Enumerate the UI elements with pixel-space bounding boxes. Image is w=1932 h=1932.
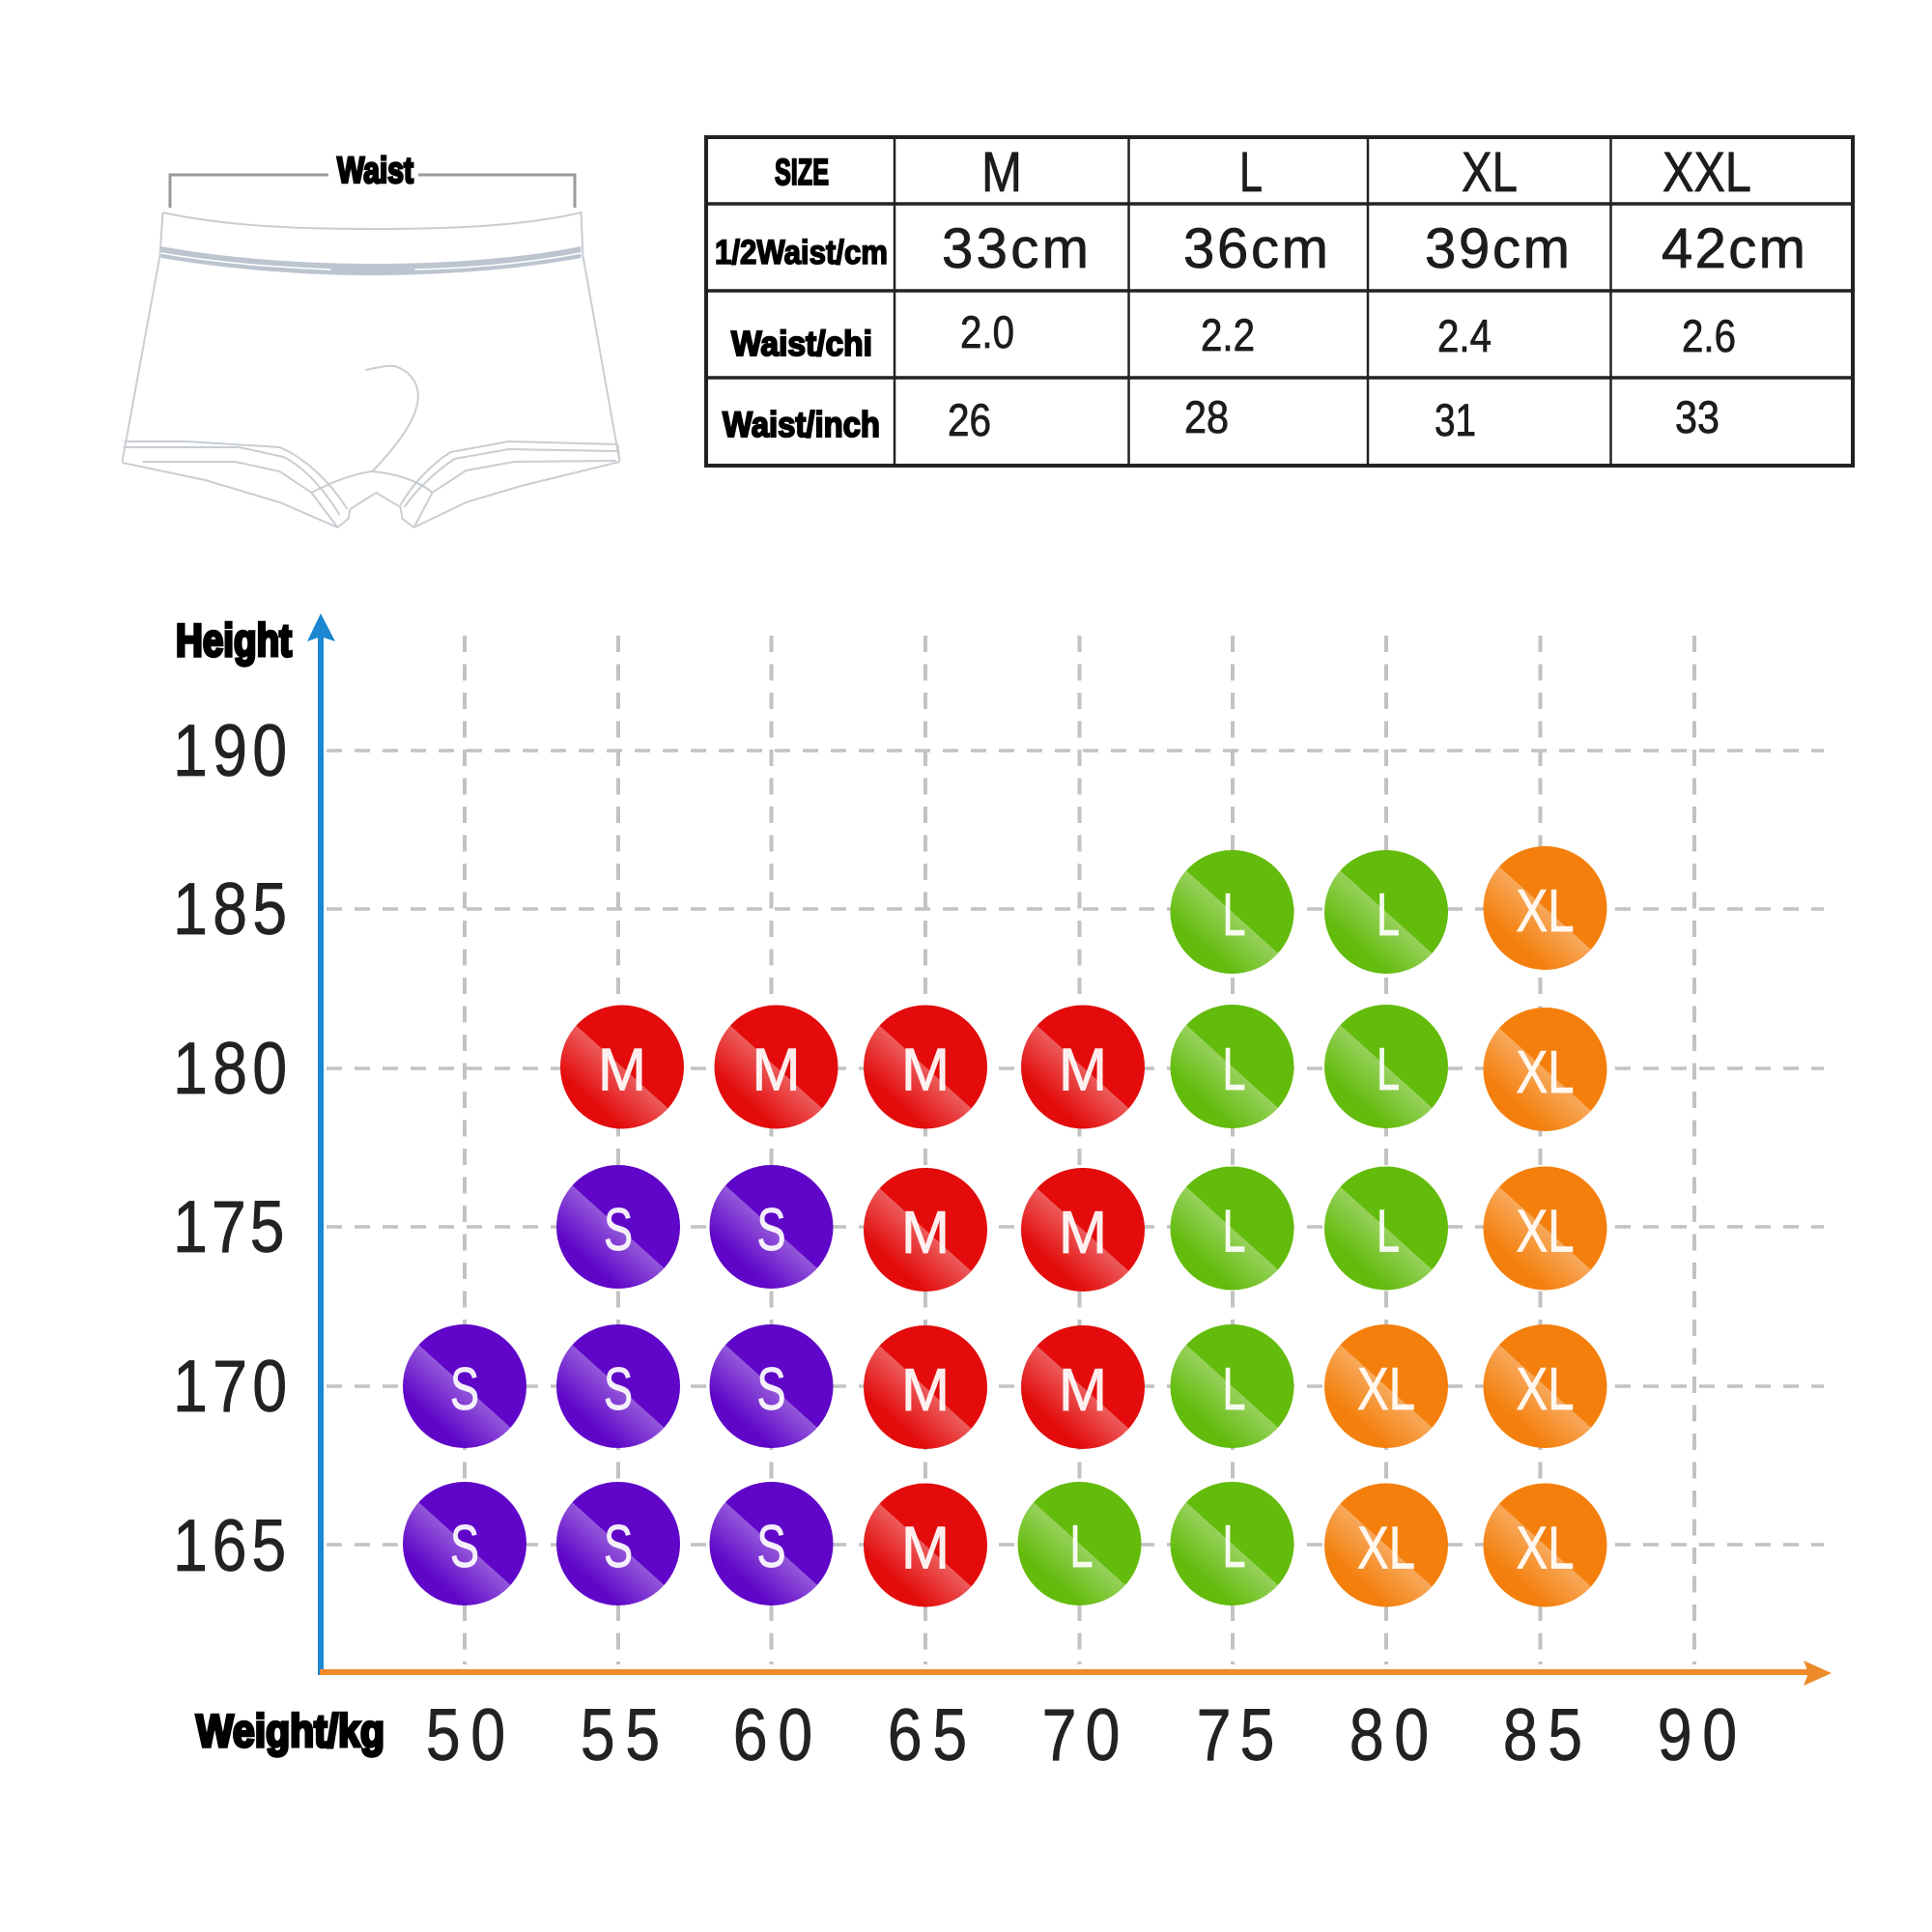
marker: S 60kg 165cm: S — [757, 1514, 785, 1580]
marker: S 55kg 165cm — [531, 1482, 680, 1631]
x axis arrow — [320, 1661, 1832, 1686]
marker: L 75kg 180cm — [1145, 1005, 1294, 1153]
marker: S 50kg 170cm — [378, 1324, 526, 1473]
y axis values: 175 — [173, 1185, 285, 1267]
marker: S 55kg 170cm — [531, 1324, 680, 1473]
waist inch row: Waist/inch — [723, 405, 880, 444]
marker: S 55kg 175cm — [531, 1165, 680, 1314]
markers: 170 cm row — [378, 1324, 1607, 1474]
y axis values: 170 — [173, 1345, 287, 1427]
header row: XXL — [1662, 141, 1751, 204]
y axis arrow — [307, 613, 335, 1675]
waist inch row: 33 — [1675, 391, 1719, 442]
half waist cm row: 1/2Waist/cm — [715, 234, 888, 271]
panel: shorts diagram — [122, 151, 620, 527]
waist measurement bracket — [170, 175, 575, 208]
marker: M 65kg 170cm: M — [901, 1357, 950, 1424]
marker: M 70kg 175cm: M — [1059, 1200, 1107, 1266]
panel: size table — [706, 137, 1853, 466]
marker: S 60kg 165cm — [684, 1482, 833, 1631]
y axis values — [173, 709, 287, 1586]
waist inch row: 31 — [1435, 394, 1476, 445]
marker: L 80kg 180cm: L — [1377, 1037, 1400, 1103]
marker: S 50kg 170cm: S — [450, 1356, 479, 1423]
waist chi row: Waist/chi — [731, 324, 872, 363]
grid lines — [327, 636, 1824, 1664]
marker: S 60kg 170cm — [684, 1324, 833, 1473]
marker: XL 80kg 170cm: XL — [1357, 1356, 1415, 1423]
markers: 185 cm row — [1145, 846, 1607, 999]
marker: L 75kg 185cm: L — [1223, 882, 1246, 949]
marker: L 75kg 175cm: L — [1223, 1198, 1246, 1265]
waist chi row: 2.2 — [1201, 309, 1255, 360]
marker: XL 80kg 170cm — [1299, 1324, 1448, 1473]
marker: M 55kg 180cm — [535, 1005, 684, 1154]
marker: M 70kg 170cm: M — [1059, 1357, 1107, 1424]
marker: S 50kg 165cm: S — [450, 1514, 479, 1580]
marker: M 65kg 175cm: M — [901, 1200, 950, 1266]
x axis values — [426, 1693, 1737, 1776]
marker: S 60kg 175cm: S — [757, 1197, 785, 1264]
marker: M 65kg 165cm: M — [901, 1515, 950, 1582]
shorts line drawing — [122, 213, 620, 527]
marker: S 60kg 175cm — [684, 1165, 833, 1314]
x axis values: 50 — [426, 1693, 505, 1776]
half waist cm row: 39cm — [1425, 217, 1570, 280]
x axis values: 65 — [888, 1693, 967, 1776]
y axis values: 185 — [173, 867, 287, 950]
y axis values: 180 — [173, 1027, 287, 1109]
waist inch row — [723, 391, 1719, 445]
marker: L 75kg 165cm: L — [1223, 1514, 1246, 1580]
marker: L 75kg 170cm — [1145, 1324, 1294, 1473]
marker: XL 85kg 180cm — [1458, 1008, 1607, 1156]
marker: XL 85kg 185cm — [1458, 846, 1607, 995]
marker: M 65kg 180cm — [838, 1005, 987, 1154]
marker: M 70kg 170cm — [996, 1325, 1145, 1474]
marker: L 80kg 175cm: L — [1377, 1198, 1400, 1265]
x axis values: 70 — [1042, 1693, 1120, 1776]
marker: M 70kg 180cm: M — [1059, 1037, 1107, 1103]
header row: L — [1239, 141, 1263, 204]
marker: S 55kg 175cm: S — [604, 1197, 633, 1264]
marker: M 70kg 180cm — [996, 1005, 1145, 1154]
marker: S 55kg 170cm: S — [604, 1356, 633, 1423]
marker: M 65kg 170cm — [838, 1325, 987, 1474]
marker: L 80kg 185cm — [1299, 850, 1448, 999]
marker: XL 85kg 165cm — [1458, 1484, 1607, 1633]
marker: S 50kg 165cm — [378, 1482, 526, 1631]
marker: L 75kg 165cm — [1145, 1482, 1294, 1631]
marker: XL 85kg 170cm — [1458, 1324, 1607, 1473]
half waist cm row: 42cm — [1662, 217, 1805, 280]
marker: M 70kg 175cm — [996, 1168, 1145, 1317]
marker: XL 85kg 180cm: XL — [1517, 1039, 1575, 1106]
marker: M 65kg 180cm: M — [901, 1037, 950, 1103]
marker: M 60kg 180cm: M — [752, 1037, 800, 1103]
marker: L 70kg 165cm — [992, 1482, 1142, 1631]
marker: XL 85kg 185cm: XL — [1517, 878, 1575, 945]
marker: XL 85kg 175cm: XL — [1517, 1198, 1575, 1265]
waist chi row — [731, 306, 1736, 363]
half waist cm row: 36cm — [1183, 217, 1328, 280]
header row: M — [981, 141, 1022, 204]
x axis values: 75 — [1197, 1693, 1274, 1776]
marker: L 80kg 180cm — [1299, 1005, 1448, 1153]
half waist cm row — [715, 217, 1805, 280]
marker: S 55kg 165cm: S — [604, 1514, 633, 1580]
waist inch row: 28 — [1184, 391, 1229, 442]
marker: XL 85kg 165cm: XL — [1517, 1515, 1575, 1582]
marker: S 60kg 170cm: S — [757, 1356, 785, 1423]
marker: M 55kg 180cm: M — [598, 1037, 646, 1103]
table grid — [706, 137, 1853, 466]
markers: 165 cm row — [378, 1482, 1607, 1633]
marker: M 60kg 180cm — [689, 1005, 838, 1154]
marker: M 65kg 165cm — [838, 1484, 987, 1633]
marker: L 75kg 180cm: L — [1223, 1037, 1246, 1103]
label: Height: Height — [176, 614, 292, 666]
x axis values: 55 — [581, 1693, 660, 1776]
waist chi row: 2.0 — [960, 306, 1014, 357]
x axis values: 85 — [1503, 1693, 1582, 1776]
label: Waist: Waist — [337, 151, 413, 191]
markers: 180 cm row — [535, 1005, 1607, 1156]
marker: L 75kg 185cm — [1145, 850, 1294, 999]
y axis values: 190 — [173, 709, 287, 791]
waist inch row: 26 — [948, 394, 991, 445]
marker: L 80kg 185cm: L — [1377, 882, 1400, 949]
waist chi row: 2.6 — [1682, 310, 1736, 361]
panel: height and weight chart — [173, 613, 1832, 1776]
marker: L 75kg 170cm: L — [1223, 1356, 1246, 1423]
waist chi row: 2.4 — [1437, 310, 1492, 361]
header row: SIZE — [775, 153, 829, 193]
marker: XL 85kg 175cm — [1458, 1167, 1607, 1316]
header row — [775, 141, 1751, 204]
marker: L 80kg 175cm — [1299, 1167, 1448, 1316]
header row: XL — [1462, 141, 1518, 204]
markers: 175 cm row — [531, 1165, 1607, 1317]
label: Weight/kg: Weight/kg — [196, 1705, 384, 1756]
marker: L 75kg 175cm — [1145, 1167, 1294, 1316]
half waist cm row: 33cm — [942, 217, 1089, 280]
x axis values: 90 — [1658, 1693, 1737, 1776]
y axis values: 165 — [173, 1504, 286, 1586]
marker: L 70kg 165cm: L — [1070, 1514, 1094, 1580]
marker: M 65kg 175cm — [838, 1168, 987, 1317]
x axis values: 60 — [733, 1693, 812, 1776]
x axis values: 80 — [1350, 1693, 1429, 1776]
marker: XL 80kg 165cm: XL — [1357, 1515, 1415, 1582]
marker: XL 85kg 170cm: XL — [1517, 1356, 1575, 1423]
marker: XL 80kg 165cm — [1299, 1484, 1448, 1633]
